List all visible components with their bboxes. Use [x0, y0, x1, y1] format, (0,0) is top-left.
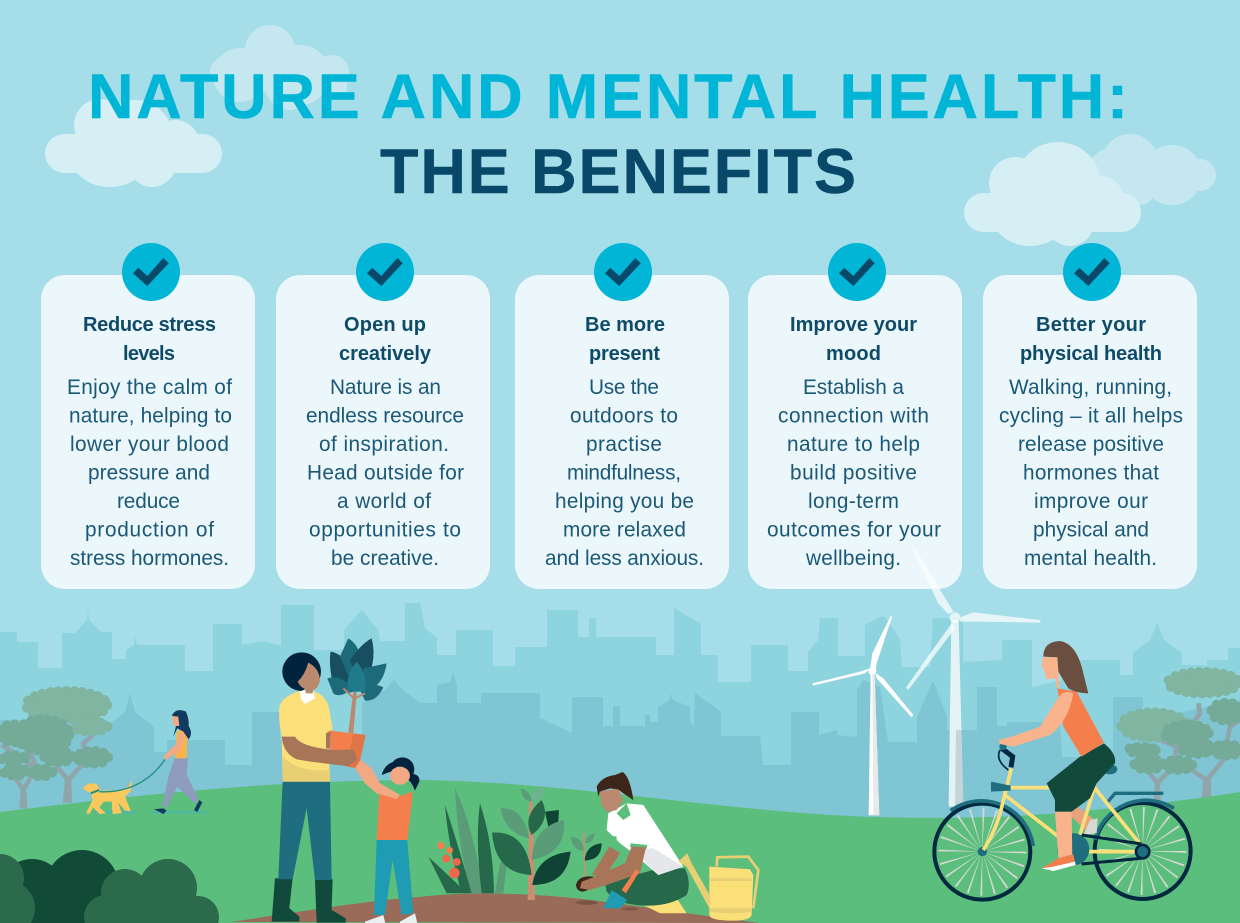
body text: outdoors to — [570, 405, 678, 428]
leash — [99, 759, 165, 792]
body text: improve our — [1034, 490, 1148, 513]
body text: mental health. — [1024, 547, 1157, 570]
body text — [306, 376, 464, 570]
body text — [67, 376, 232, 570]
heading: physical health — [1020, 343, 1162, 365]
icon: check badge — [356, 243, 414, 301]
heading: levels — [123, 343, 175, 365]
body text: more relaxed — [563, 519, 686, 542]
girl — [355, 757, 419, 923]
body text: endless resource — [306, 405, 464, 428]
body text: helping you be — [555, 490, 694, 513]
title — [88, 62, 1128, 207]
cloud: right pale — [1086, 134, 1216, 205]
woman — [154, 710, 202, 814]
walking woman and dog — [83, 710, 208, 814]
heading — [83, 314, 216, 365]
body text: outcomes for your — [767, 519, 941, 542]
card: improve your mood — [748, 243, 962, 589]
bicycle and rider — [934, 641, 1191, 900]
body text — [545, 376, 704, 570]
body text: of inspiration. — [319, 433, 449, 456]
berries — [437, 842, 461, 878]
jeans — [278, 782, 332, 880]
body text — [767, 376, 941, 570]
cloud: top centre — [210, 25, 349, 110]
body text: reduce — [117, 490, 180, 513]
turbine: large mast — [949, 620, 963, 812]
dog — [83, 780, 208, 814]
body text: Walking, running, — [1009, 376, 1172, 399]
body text: Use the — [589, 376, 659, 399]
body text: Nature is an — [330, 376, 441, 399]
trees: right — [1121, 672, 1240, 803]
body text: practise — [586, 433, 662, 456]
body text: production of — [85, 519, 214, 542]
plants and gardener — [428, 772, 758, 921]
heading: Be more — [585, 314, 665, 336]
body text: lower your blood — [70, 433, 229, 456]
body text — [999, 376, 1183, 570]
tall plant — [492, 787, 571, 900]
card: be more present — [515, 243, 729, 589]
body text: long-term — [808, 490, 899, 513]
cloud: top left — [45, 99, 222, 187]
icon: check badge — [828, 243, 886, 301]
heading: Improve your — [790, 314, 917, 336]
card: reduce stress levels — [41, 243, 255, 589]
saddle — [1103, 764, 1117, 774]
seedling — [571, 827, 602, 905]
turbine: small — [813, 615, 913, 815]
rider — [998, 641, 1115, 871]
heading: mood — [826, 343, 881, 365]
heading: Better your — [1036, 314, 1146, 336]
body text: physical and — [1033, 519, 1149, 542]
title: THE BENEFITS — [380, 137, 856, 207]
body text: stress hormones. — [70, 547, 229, 570]
body text: nature, helping to — [69, 405, 232, 428]
rack — [1107, 793, 1163, 803]
body text: Head outside for — [307, 462, 464, 485]
wheels — [934, 800, 1191, 900]
body text: hormones that — [1023, 462, 1159, 485]
body text: opportunities to — [309, 519, 461, 542]
heading: Reduce stress — [83, 314, 216, 336]
card: open up creatively — [276, 243, 490, 589]
chain and crank — [1057, 833, 1151, 865]
trees: left — [0, 691, 108, 808]
body text: mindfulness, — [567, 462, 681, 485]
turbine: large blades — [906, 547, 1041, 690]
icon: check badge — [122, 243, 180, 301]
body text: cycling – it all helps — [999, 405, 1183, 428]
heading: present — [589, 343, 660, 365]
watering can — [678, 853, 758, 921]
gardener — [580, 772, 689, 913]
back leg — [1072, 802, 1097, 835]
heading — [585, 314, 665, 365]
heading — [339, 314, 432, 365]
soil mound — [230, 894, 760, 923]
heading — [790, 314, 917, 365]
frame — [983, 768, 1142, 852]
boots — [272, 878, 346, 923]
body text: be creative. — [331, 547, 439, 570]
card: better your physical health — [983, 243, 1197, 589]
body text: wellbeing. — [805, 547, 901, 570]
benefit cards — [41, 243, 1197, 589]
city skyline: back layer — [0, 603, 1240, 830]
handlebars — [999, 743, 1013, 770]
cloud: right front — [964, 142, 1141, 246]
body text: Enjoy the calm of — [67, 376, 232, 399]
city skyline: front layer — [0, 672, 1240, 830]
icon: check badge — [1063, 243, 1121, 301]
body text: release positive — [1018, 433, 1164, 456]
ground — [0, 780, 1240, 923]
bushes — [0, 850, 219, 923]
body text: nature to help — [787, 433, 920, 456]
heading: creatively — [339, 343, 432, 365]
body text: build positive — [790, 462, 917, 485]
trowel — [622, 869, 639, 893]
body text: connection with — [778, 405, 929, 428]
shirt — [279, 691, 333, 782]
body text: pressure and — [88, 462, 210, 485]
grass clump — [428, 788, 507, 893]
heading: Open up — [344, 314, 426, 336]
body text: a world of — [337, 490, 431, 513]
plant — [327, 638, 387, 733]
title: NATURE AND MENTAL HEALTH: — [88, 62, 1128, 132]
pot — [330, 731, 366, 768]
icon: check badge — [594, 243, 652, 301]
head — [282, 652, 321, 704]
body text: and less anxious. — [545, 547, 704, 570]
arm — [282, 737, 357, 766]
body text: Establish a — [803, 376, 904, 399]
woman holding plant — [272, 638, 387, 923]
heading — [1020, 314, 1162, 365]
